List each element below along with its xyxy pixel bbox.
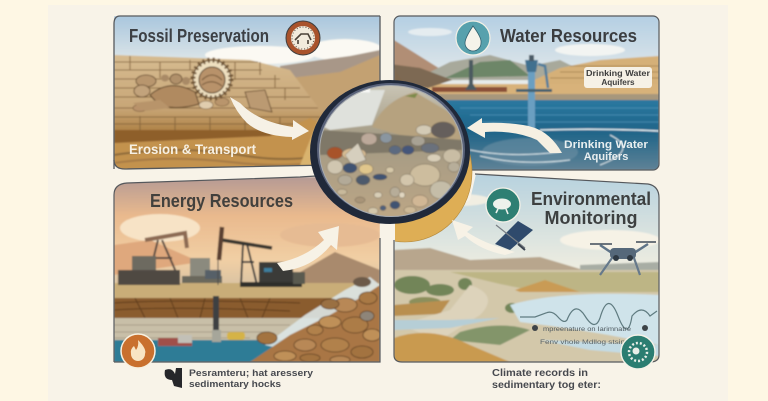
arrow: monitoring to lens (452, 220, 515, 255)
heading: fossil preservation: Fossil Preservation (129, 26, 269, 46)
heading: water resources: Water Resources (500, 26, 637, 46)
callout: drinking water aquifers: Aquifers (601, 78, 635, 87)
heading: energy resources: Energy Resources (150, 191, 293, 211)
gold disc behind lens (395, 153, 472, 242)
caption: climate records: Climate records in (492, 368, 588, 379)
panel: environmental monitoring (394, 174, 660, 391)
caption: climate records (492, 368, 601, 391)
heading: environmental monitoring: Monitoring (544, 208, 638, 228)
panel: water resources (390, 16, 659, 170)
rock pile (250, 277, 381, 364)
heading: environmental monitoring: Environmental (531, 189, 651, 209)
label: erosion and transport: Erosion & Transport (129, 142, 256, 157)
well pipe (158, 296, 245, 346)
water pump (516, 55, 552, 130)
icon: fire badge (121, 334, 155, 368)
distant tower (465, 60, 477, 90)
label: drinking water aquifers (564, 139, 649, 163)
icon: satellite plane (495, 221, 533, 250)
caption: energy: sedimentary hocks (189, 379, 281, 390)
ammonite fossil (193, 60, 231, 98)
caption: energy: Pesramteru; hat aressery (189, 368, 314, 379)
magnifying lens (310, 80, 470, 224)
icon: water drop (456, 21, 490, 55)
sand cone (390, 64, 452, 88)
callout: drinking water aquifers: Drinking Water (586, 69, 651, 78)
pump jack right (218, 227, 305, 287)
arrow: erosion to lens (230, 97, 309, 140)
caption: climate records: sedimentary tog eter: (492, 380, 601, 391)
icon: fossil badge (286, 21, 320, 55)
icon: climate badge (621, 335, 655, 369)
chart: temperature wave: Fenv vhole Mdllog stsin (540, 340, 625, 346)
arrow: energy to lens (277, 226, 339, 271)
chart: temperature wave: mpreenature on Iarimnatre (543, 326, 632, 333)
caption: energy (165, 368, 314, 390)
label: drinking water aquifers: Aquifers (584, 151, 628, 163)
chart: temperature wave (520, 303, 657, 346)
heading: environmental monitoring (531, 189, 651, 228)
label: drinking water aquifers: Drinking Water (564, 139, 649, 151)
pump jack left (118, 233, 222, 285)
callout: drinking water aquifers (584, 67, 652, 88)
icon: drone (590, 242, 656, 275)
arrow: water to lens (467, 118, 562, 153)
icon: monitoring badge (486, 188, 520, 222)
panel: energy resources (114, 176, 381, 390)
icon: caption glyph (165, 368, 182, 388)
fossil rock lump (133, 74, 272, 112)
panel: fossil preservation (114, 16, 383, 170)
